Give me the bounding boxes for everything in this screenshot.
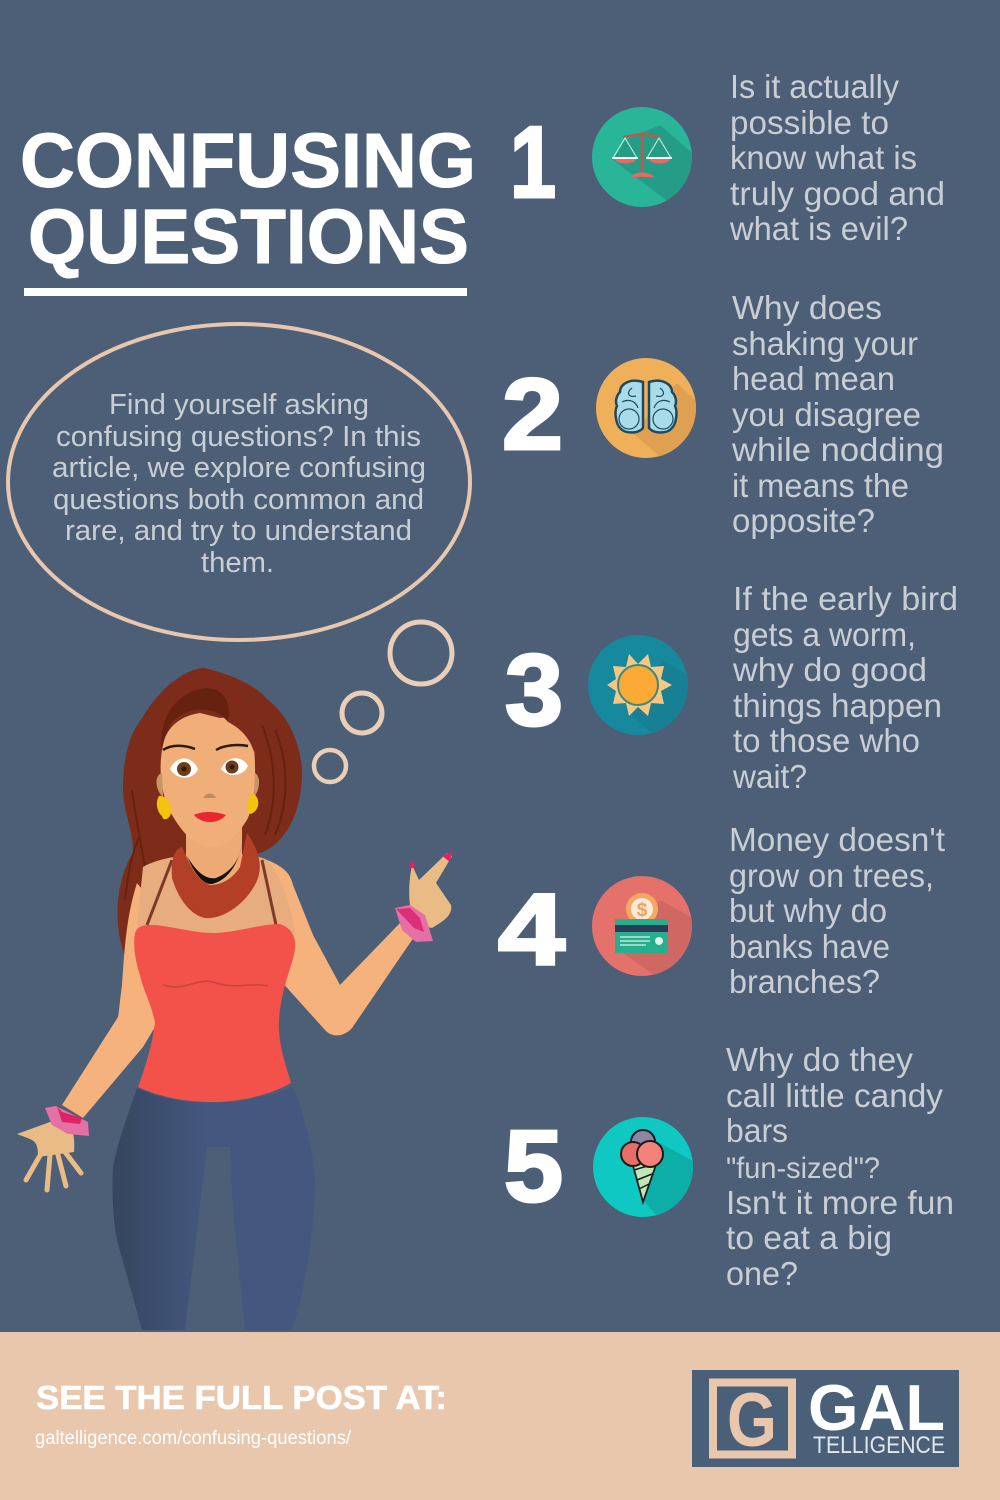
icon: brain bbox=[596, 358, 696, 458]
question 2: while nodding bbox=[731, 431, 944, 468]
ears bbox=[156, 773, 259, 797]
thought bubble: intro: rare, and try to understand bbox=[65, 515, 412, 547]
title: CONFUSING bbox=[20, 118, 476, 204]
nose bbox=[203, 794, 216, 798]
icon: coin and card: $ bbox=[637, 900, 648, 921]
left hand bbox=[409, 853, 452, 928]
question 5: Why do they bbox=[726, 1041, 914, 1078]
number 1: 1 bbox=[510, 107, 556, 219]
question 4: banks have bbox=[729, 928, 890, 965]
thought bubble: intro: them. bbox=[201, 547, 274, 579]
question 2: you disagree bbox=[732, 396, 921, 433]
question 3: to those who bbox=[733, 722, 920, 759]
question 3: things happen bbox=[733, 687, 942, 724]
question 2 bbox=[731, 289, 944, 539]
question 1 bbox=[729, 68, 945, 247]
question 4: branches? bbox=[729, 963, 880, 1000]
earrings bbox=[157, 796, 171, 819]
question 1: Is it actually bbox=[730, 68, 899, 105]
question 4: Money doesn't bbox=[729, 821, 945, 858]
logo bbox=[692, 1370, 959, 1467]
character: woman pointing bbox=[17, 668, 452, 1330]
title bbox=[20, 118, 476, 296]
question 5 bbox=[726, 1041, 954, 1292]
footer call to action: SEE THE FULL POST AT: bbox=[36, 1379, 447, 1416]
thought bubble: intro: questions both common and bbox=[53, 484, 424, 516]
number 5: 5 bbox=[504, 1111, 563, 1223]
question 3: wait? bbox=[732, 758, 807, 795]
left arm (viewer right) bbox=[255, 860, 414, 1035]
question 3: If the early bird bbox=[733, 580, 958, 617]
scarf bbox=[172, 833, 260, 918]
question 5: to eat a big bbox=[726, 1219, 892, 1256]
icon: coin and card bbox=[592, 876, 692, 976]
question 4: but why do bbox=[729, 892, 887, 929]
hair front bbox=[161, 688, 229, 750]
right hand bbox=[17, 1122, 81, 1190]
question 5: "fun-sized"? bbox=[726, 1152, 880, 1185]
question 3: why do good bbox=[732, 651, 927, 688]
thought bubble: intro bbox=[8, 324, 470, 640]
halter straps bbox=[147, 860, 276, 925]
question 5: Isn't it more fun bbox=[726, 1184, 954, 1221]
right scrunchie bbox=[45, 1106, 89, 1136]
eyebrows bbox=[163, 745, 248, 750]
logo: G bbox=[727, 1378, 777, 1463]
red top bbox=[134, 924, 295, 1102]
icon: ice cream bbox=[593, 1117, 693, 1217]
pants bbox=[112, 1087, 315, 1330]
thought bubble: intro: confusing questions? In this bbox=[56, 421, 421, 453]
face bbox=[161, 713, 255, 847]
footer url: galtelligence.com/confusing-questions/ bbox=[35, 1428, 352, 1449]
hair back bbox=[118, 668, 302, 966]
question 2: shaking your bbox=[732, 325, 918, 362]
neck bbox=[186, 825, 242, 892]
question 1: know what is bbox=[730, 139, 917, 176]
thought bubble: intro: Find yourself asking bbox=[109, 389, 369, 421]
thought bubble circles bbox=[314, 622, 452, 782]
question 2: head mean bbox=[732, 360, 895, 397]
question 1: truly good and bbox=[730, 175, 945, 212]
question 2: Why does bbox=[732, 289, 882, 326]
number 4: 4 bbox=[498, 874, 565, 986]
question 2: it means the bbox=[732, 467, 909, 504]
number 3: 3 bbox=[505, 635, 563, 747]
icon: scales bbox=[592, 107, 692, 207]
number 2: 2 bbox=[502, 359, 563, 471]
question 3 bbox=[732, 580, 958, 795]
question 4 bbox=[729, 821, 945, 1000]
question 5: one? bbox=[726, 1255, 798, 1292]
hair strands bbox=[125, 725, 286, 900]
logo: GAL bbox=[808, 1371, 945, 1444]
right arm (viewer left) bbox=[62, 883, 175, 1118]
logo: TELLIGENCE bbox=[813, 1432, 945, 1459]
question 3: gets a worm, bbox=[733, 616, 916, 653]
eyes bbox=[170, 758, 248, 778]
lips bbox=[194, 812, 226, 822]
question 2: opposite? bbox=[732, 502, 875, 539]
icon: sun bbox=[588, 635, 688, 735]
question 5: bars bbox=[726, 1112, 788, 1149]
title: QUESTIONS bbox=[28, 194, 469, 280]
question 5: call little candy bbox=[726, 1077, 943, 1114]
torso skin bbox=[135, 853, 296, 945]
question 1: possible to bbox=[730, 104, 889, 141]
question 4: grow on trees, bbox=[729, 857, 934, 894]
question 1: what is evil? bbox=[729, 210, 908, 247]
thought bubble: intro: article, we explore confusing bbox=[52, 452, 426, 484]
footer band bbox=[0, 1332, 1000, 1500]
left scrunchie bbox=[395, 905, 433, 942]
